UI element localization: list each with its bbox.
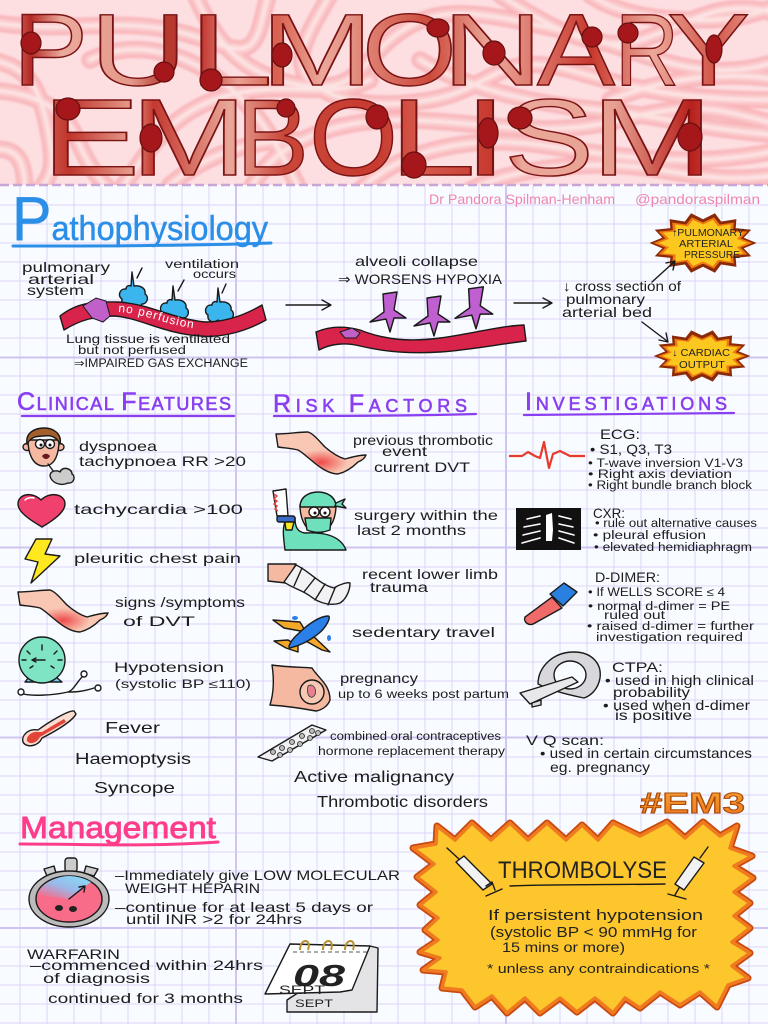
icon: leg <box>276 432 366 474</box>
text: warfarin: of diagnosis <box>43 970 150 986</box>
icon: surgeon with saw <box>273 489 346 550</box>
credit: Dr Pandora Spilman-Henham <box>429 191 615 207</box>
text: VQ scan: • used in certain circumstances <box>540 745 752 761</box>
heading: pathophysiology: Pathophysiology <box>12 185 268 254</box>
text: alveoli collapse <box>338 253 503 287</box>
icon: thermometer <box>23 711 76 746</box>
text: CTPA <box>603 659 754 723</box>
text: thrombolyse criteria: If persistent hypotension <box>488 907 703 924</box>
icon: breathless face <box>23 428 74 484</box>
text: previous thrombotic <box>353 432 493 475</box>
text: pregnancy: up to 6 weeks post partum <box>338 689 509 701</box>
icon: left syringe <box>447 848 502 896</box>
callout: pulmonary arterial pressure: PRESSURE <box>684 250 740 261</box>
title: embolism: M <box>591 77 713 199</box>
text: d-dimer: D-DIMER: <box>595 569 660 585</box>
icon: ECG trace <box>509 442 585 468</box>
text: hypotension <box>114 659 251 691</box>
vessel with clot: no perfusion: no perfusion <box>118 306 194 328</box>
text: CTPA: CTPA: <box>612 659 663 675</box>
icon: lightning <box>25 539 60 583</box>
text: pregnancy: pregnancy <box>340 670 418 686</box>
text: surgery: last 2 months <box>357 522 466 538</box>
text: VQ scan: V Q scan: <box>526 732 604 748</box>
text: recent lower limb trauma <box>362 566 498 595</box>
title: embolism: L <box>389 77 476 199</box>
text: other features: Fever <box>105 720 161 737</box>
text: heparin: –continue for at least 5 days or <box>115 899 373 915</box>
panel: pathophysiology <box>12 185 756 382</box>
text: ECG: • Right bundle branch block <box>588 480 752 492</box>
text: d-dimer: • raised d-dimer = further <box>587 621 754 633</box>
text: ECG: • S1, Q3, T3 <box>590 441 672 457</box>
text: CXR: CXR: <box>593 505 625 521</box>
text: previous thrombotic: previous thrombotic <box>353 432 493 448</box>
text: dyspnoea: dyspnoea <box>79 438 157 454</box>
blood clots on the title letters <box>21 19 722 178</box>
callout: thrombolyse <box>413 822 753 1013</box>
text: signs of DVT <box>115 594 245 629</box>
icon: blood tube <box>525 583 577 624</box>
icon: right syringe <box>668 847 708 899</box>
vessel with clot <box>316 325 526 353</box>
text: ventilation occurs <box>165 259 239 281</box>
text: hypotension: Hypotension <box>114 659 224 675</box>
text: cross section: pulmonary <box>566 291 645 307</box>
icon: calendar <box>265 941 378 1012</box>
callout: pulmonary arterial pressure: ↑PULMONARY <box>672 228 744 239</box>
text: pregnancy <box>338 670 509 701</box>
text: signs of DVT: of DVT <box>123 613 196 629</box>
title: embolism: O <box>309 77 398 199</box>
icon: calendar: SEPT <box>279 983 326 997</box>
text: dyspnoea: tachypnoea RR >20 <box>79 453 246 469</box>
title: embolism: S <box>504 77 594 199</box>
text: surgery <box>354 507 498 538</box>
icon: leg with DVT <box>18 590 108 632</box>
callout: cardiac output <box>656 332 748 380</box>
text: CXR: • elevated hemidiaphragm <box>594 542 752 554</box>
icon: calendar: 08 <box>293 958 346 993</box>
text: VQ scan: eg. pregnancy <box>550 759 650 775</box>
panel: investigations <box>509 388 757 775</box>
text: VQ scan <box>526 732 752 775</box>
text: alveoli collapse: ⇒ WORSENS HYPOXIA <box>338 271 503 287</box>
hashtag: EM3: #EM3 <box>640 788 745 820</box>
callout: pulmonary arterial pressure <box>652 215 754 271</box>
text: CXR: • rule out alternative causes <box>595 518 757 530</box>
text: pulmonary arterial system: pulmonary <box>22 259 110 275</box>
arrow up <box>652 261 675 282</box>
text: d-dimer: ruled out <box>604 610 666 622</box>
text: CTPA: is positive <box>615 707 692 723</box>
text: ECG: • Right axis deviation <box>588 469 732 481</box>
icon: heart <box>18 495 65 527</box>
title: embolism: M <box>131 77 247 199</box>
text: d-dimer: • normal d-dimer = PE <box>588 601 730 613</box>
callout: cardiac output: OUTPUT <box>679 360 725 371</box>
callout: pulmonary arterial pressure: ARTERIAL <box>679 239 733 250</box>
text: CXR <box>593 505 757 554</box>
icon: stopwatch <box>29 858 109 927</box>
text: CXR: • pleural effusion <box>593 530 706 542</box>
text: other features <box>75 720 191 797</box>
text: thrombolyse criteria <box>487 907 710 976</box>
heading: thrombolyse: THROMBOLYSE <box>498 857 667 884</box>
text: alveoli collapse: alveoli collapse <box>355 253 478 269</box>
text: dyspnoea <box>79 438 246 469</box>
icon: calendar: SEPT <box>295 998 333 1010</box>
heading: risk factors: R ISK F ACTORS <box>273 390 467 418</box>
text: malignancy and thrombotic disorders: Thrombotic disorders <box>317 794 488 811</box>
icon: leg in cast <box>268 564 350 605</box>
text: contraceptives and HRT: hormone replacement therapy <box>318 746 505 758</box>
text: heparin: until INR >2 for 24hrs <box>126 911 302 927</box>
text: CTPA: • used when d-dimer <box>603 697 750 713</box>
text: CTPA: • used in high clinical <box>605 672 754 688</box>
text: surgery: surgery within the <box>354 507 498 523</box>
text: pleuritic chest pain: pleuritic chest pain <box>74 550 241 566</box>
text: tachycardia: tachycardia >100 <box>74 501 243 517</box>
heading: investigations: INVESTIGATIONS <box>525 388 727 416</box>
icon: chest x-ray <box>516 508 581 550</box>
text: warfarin: continued for 3 months <box>48 990 243 1006</box>
header banner <box>0 0 768 199</box>
arrow down <box>642 322 668 342</box>
panel: management <box>20 810 400 1012</box>
text: hypotension: (systolic BP ≤110) <box>115 679 251 691</box>
text: warfarin: –commenced within 24hrs <box>30 957 263 973</box>
title: embolism: B <box>236 77 309 199</box>
text: d-dimer <box>587 569 754 644</box>
vessel with clot: no perfusion <box>59 298 267 338</box>
icon: blue alveoli <box>119 268 233 323</box>
text: d-dimer: investigation required <box>596 632 743 644</box>
title: embolism: I <box>463 77 508 199</box>
text: previous thrombotic: current DVT <box>374 459 471 475</box>
icon: pregnant abdomen <box>270 665 330 711</box>
heading: management: Management <box>20 810 216 845</box>
text: cross section <box>562 278 681 320</box>
text: heparin: –Immediately give LOW MOLECULAR <box>115 867 400 883</box>
icon: CT scanner <box>520 652 600 707</box>
text: contraceptives and HRT: combined oral contraceptives <box>330 731 501 743</box>
text: malignancy and thrombotic disorders <box>294 769 488 811</box>
arrow <box>514 298 552 308</box>
text: d-dimer: • If WELLS SCORE ≤ 4 <box>588 587 726 599</box>
text: lung tissue not perfused: Lung tissue is ventilated <box>66 334 230 346</box>
icon: aeroplane <box>273 616 331 652</box>
arrow <box>286 300 331 310</box>
text: ECG: • T-wave inversion V1-V3 <box>588 458 743 470</box>
text: contraceptives and HRT <box>318 731 505 758</box>
icon: collapsed alveoli <box>370 287 493 336</box>
text: lung tissue not perfused: but not perfused <box>78 345 186 357</box>
text: lung tissue not perfused: ⇒IMPAIRED GAS EXCHANGE <box>74 358 248 370</box>
text: thrombolyse criteria: (systolic BP < 90 mmHg for <box>490 924 697 941</box>
text: thrombolyse criteria: 15 mins or more) <box>502 939 625 955</box>
text: ventilation occurs: ventilation <box>165 259 239 271</box>
text: recent lower limb trauma: recent lower limb <box>362 566 498 582</box>
text: sedentary travel: sedentary travel <box>352 624 495 640</box>
text: CTPA: probability <box>613 684 690 700</box>
text: other features: Syncope <box>94 780 175 797</box>
text: ventilation occurs: occurs <box>193 269 236 281</box>
icon: blood pressure gauge and stethoscope <box>18 637 101 695</box>
text: lung tissue not perfused <box>66 334 248 370</box>
text: cross section: ↓ cross section of <box>563 278 681 294</box>
credit <box>429 191 760 207</box>
callout: cardiac output: ↓ CARDIAC <box>672 348 730 359</box>
text: signs of DVT: signs /symptoms <box>115 594 245 610</box>
text: heparin: WEIGHT HEPARIN <box>125 880 260 896</box>
text: malignancy and thrombotic disorders: Active malignancy <box>294 769 454 786</box>
credit: @pandoraspilman <box>635 191 760 207</box>
text: warfarin <box>27 946 263 1006</box>
text: previous thrombotic: event <box>382 443 427 459</box>
panel: clinical features <box>17 388 251 797</box>
text: thrombolyse criteria: * unless any contraindications * <box>487 961 710 976</box>
text: other features: Haemoptysis <box>75 751 191 768</box>
heading: clinical features: CLINICAL FEATURES <box>17 388 231 416</box>
text: pulmonary arterial system: arterial <box>28 271 94 287</box>
text: cross section: arterial bed <box>562 304 652 320</box>
icon: pill blister pack <box>258 725 326 761</box>
text: ECG: ECG: <box>600 426 640 442</box>
text: heparin <box>115 867 400 927</box>
text: ECG <box>588 426 752 492</box>
text: recent lower limb trauma: trauma <box>370 579 428 595</box>
text: pulmonary arterial system: system <box>27 282 84 298</box>
text: pulmonary arterial system <box>22 259 110 298</box>
title: embolism: E <box>42 77 140 199</box>
text: warfarin: WARFARIN <box>27 946 120 962</box>
panel: risk factors <box>258 390 509 811</box>
